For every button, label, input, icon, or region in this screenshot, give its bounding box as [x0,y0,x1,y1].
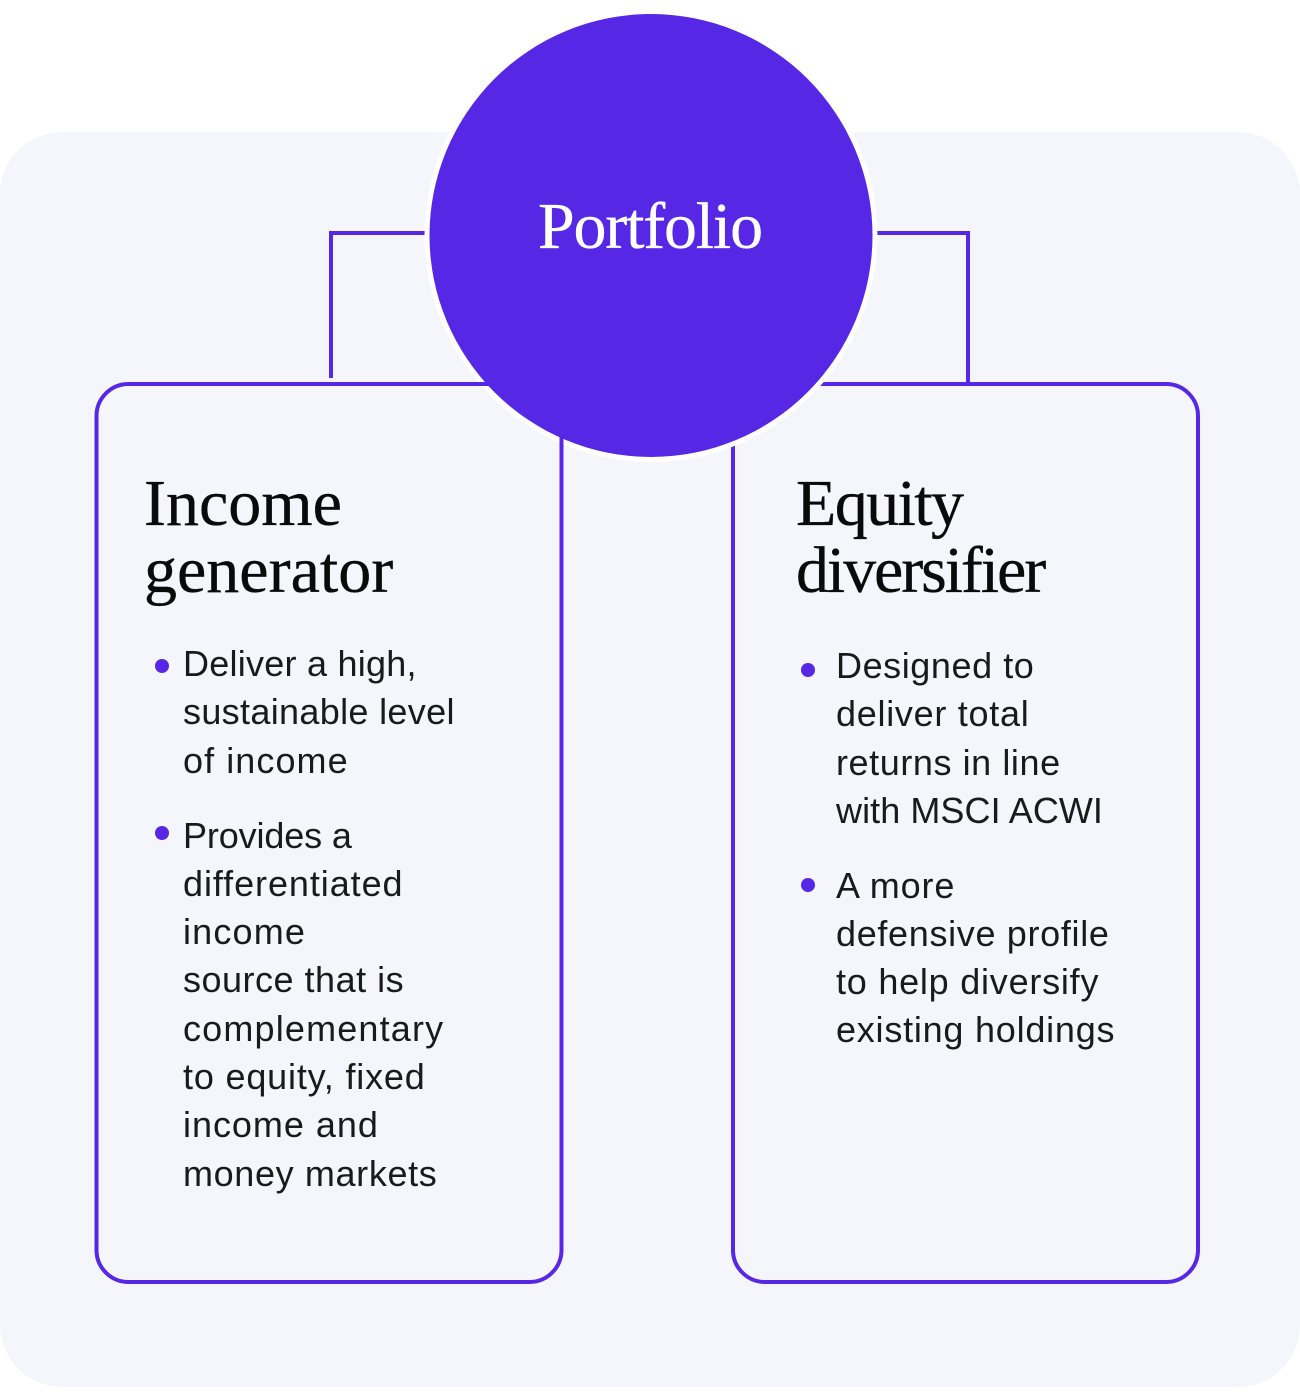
card: equity diversifier outline [733,384,1198,1282]
list: income points 1: of income [183,740,349,781]
list: equity points 1: returns in line [836,742,1061,783]
list: equity points 1 [836,645,1103,831]
list: income points 2: source that is [183,959,404,1000]
heading: equity diversifier [796,467,1046,607]
list: income points 2: income and [183,1104,379,1145]
list: income points 2: differentiated [183,863,404,904]
list: equity points 2: existing holdings [836,1009,1115,1050]
heading: income generator [144,467,393,607]
list: equity points 1: with MSCI ACWI [836,790,1103,831]
list: income points 2 [183,814,444,1194]
heading: income generator: Income [144,467,342,540]
list: equity points 2: defensive profile [836,913,1110,954]
list: income points 1: Deliver a high, [183,643,417,684]
bullet: equity 2 [801,878,815,892]
card: income generator top line overlap [470,384,562,445]
circle halo [424,9,878,462]
connector: left [331,233,426,378]
heading: equity diversifier: Equity [796,467,962,540]
list: income points 2: Provides a [183,814,352,856]
list: equity points 2: to help diversify [836,961,1099,1002]
list: equity points 1: Designed to [836,645,1034,686]
heading: equity diversifier: diversifier [796,534,1044,607]
bullet: equity 1 [801,663,815,677]
circle: portfolio [430,14,872,457]
list: income points 2: income [183,911,306,952]
list: equity points 2 [836,864,1115,1050]
list: equity points 1: deliver total [836,693,1029,734]
list: income points 2: money markets [183,1153,437,1194]
list: equity points 2: A more [836,864,955,906]
bullet: income 1 [155,659,169,673]
connector: right [877,233,968,384]
bullet: income 2 [155,826,169,840]
heading: income generator: generator [144,534,393,607]
list: income points 2: to equity, fixed [183,1056,426,1097]
circle label: Portfolio [538,190,762,263]
list: income points 1 [183,643,455,781]
card: income generator outline [96,384,562,1282]
list: income points 2: complementary [183,1008,444,1049]
list: income points 1: sustainable level [183,691,455,732]
